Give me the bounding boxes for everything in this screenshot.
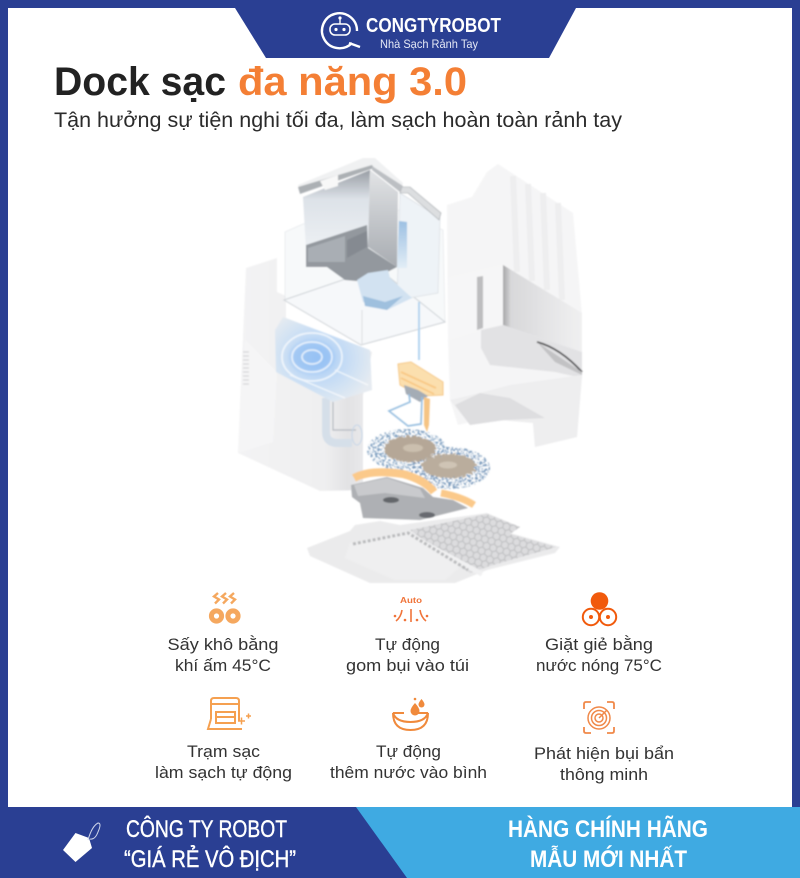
left unit body <box>238 258 372 491</box>
front water tank <box>298 158 412 310</box>
label: khí ấm 45°C <box>175 657 271 675</box>
label: gom bụi vào túi <box>346 657 469 675</box>
icon: water bowl with drops <box>393 698 428 730</box>
heater and pump module <box>389 362 443 432</box>
water pipe <box>418 302 420 360</box>
label: Tự động <box>376 743 441 761</box>
feature: dust collection <box>346 595 469 675</box>
title: Dock sạc <box>54 60 226 104</box>
label: Trạm sạc <box>187 743 260 761</box>
footer claim: HÀNG CHÍNH HÃNG <box>508 815 708 843</box>
footer slogan <box>124 815 296 873</box>
label <box>155 743 292 782</box>
label: Giặt giẻ bằng <box>545 635 653 654</box>
feature: self-cleaning station <box>155 698 292 782</box>
logo tagline: Nhà Sạch Rảnh Tay <box>380 37 478 51</box>
rear water tank <box>397 187 441 300</box>
icon: hot water mop wash <box>583 592 616 625</box>
title: đa năng 3.0 <box>238 60 467 104</box>
header logo banner <box>235 8 576 58</box>
label <box>534 745 674 784</box>
label: Sấy khô bằng <box>168 635 278 654</box>
feature: smart dirt detection <box>534 702 674 784</box>
label: thông minh <box>560 766 648 784</box>
icon: radar scan <box>584 702 614 733</box>
exploded product illustration <box>238 158 582 583</box>
base floor plate <box>307 513 560 583</box>
footer slogan: “GIÁ RẺ VÔ ĐỊCH” <box>124 844 296 873</box>
mop pads <box>367 429 490 489</box>
label <box>330 743 487 782</box>
logo wordmark: CONGTYROBOT <box>366 15 501 37</box>
label: Phát hiện bụi bẩn <box>534 745 674 763</box>
footer claim: MẪU MỚI NHẤT <box>530 844 687 873</box>
transparent housing <box>284 210 445 345</box>
label <box>536 635 662 675</box>
label <box>346 636 469 675</box>
robot base with orange glow <box>351 472 474 520</box>
title <box>54 60 467 104</box>
icon: auto dust collection: Auto <box>400 595 422 605</box>
footer slogan: CÔNG TY ROBOT <box>126 815 287 843</box>
fan heater module <box>275 317 372 402</box>
feature: hot wash <box>536 592 662 675</box>
footer banner <box>0 807 800 878</box>
label: Tự động <box>375 636 440 654</box>
icon: warm air drying <box>211 593 238 621</box>
footer claim <box>508 815 708 873</box>
subtitle: Tận hưởng sự tiện nghi tối đa, làm sạch hoàn toàn rảnh tay <box>54 109 623 132</box>
icon: price tag <box>63 823 100 862</box>
icon: charging station <box>208 698 251 729</box>
label <box>168 635 278 675</box>
icon: robot logo <box>322 13 360 48</box>
label: thêm nước vào bình <box>330 764 487 782</box>
label: làm sạch tự động <box>155 764 292 782</box>
label: nước nóng 75°C <box>536 657 662 675</box>
feature: drying <box>168 593 278 675</box>
right unit <box>447 164 582 447</box>
feature: auto water refill <box>330 698 487 782</box>
